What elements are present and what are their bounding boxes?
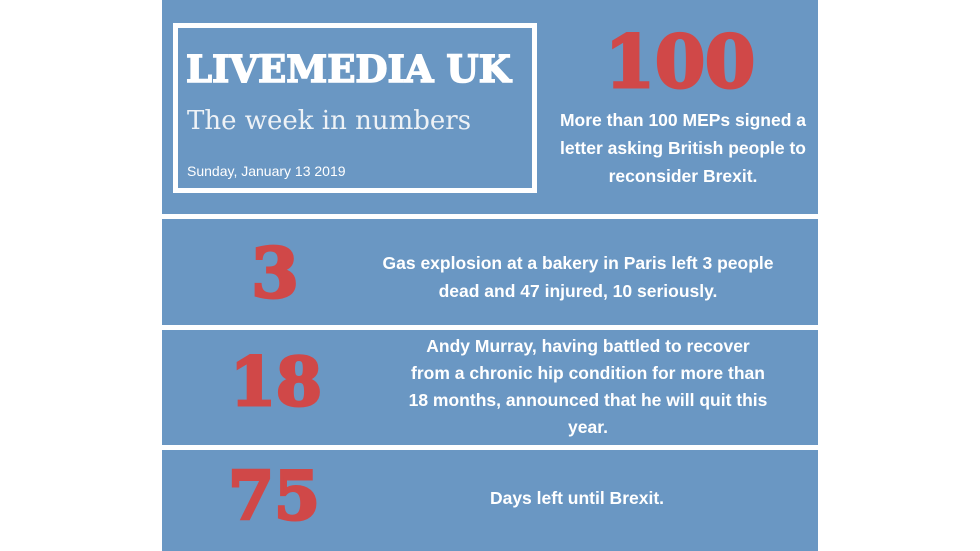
panel: row 3 [162, 219, 818, 325]
text: MEPs letter: letter asking British people to [560, 138, 806, 158]
panel: row 75 [162, 450, 818, 551]
title: LIVEMEDIA UK [186, 47, 511, 91]
text: brexit days: Days left until Brexit. [490, 488, 664, 508]
stat: 75: 75 [228, 457, 320, 535]
stat: 100: 100 [605, 19, 755, 104]
text: Andy Murray: 18 months, announced that he will quit this [409, 390, 767, 410]
stat: 18: 18 [230, 343, 322, 421]
text: Andy Murray: year. [568, 417, 608, 437]
text: gas explosion: Gas explosion at a bakery in Paris left 3 people [382, 253, 773, 273]
text: Andy Murray [409, 336, 767, 437]
subtitle: The week in numbers [187, 106, 471, 136]
text: MEPs letter: reconsider Brexit. [609, 166, 757, 186]
text: MEPs letter: More than 100 MEPs signed a [560, 110, 806, 130]
title box [173, 23, 537, 193]
date: Sunday, January 13 2019 [187, 163, 346, 179]
text: Andy Murray: from a chronic hip condition for more than [411, 363, 765, 383]
stat: 3: 3 [251, 234, 299, 314]
text: Andy Murray: Andy Murray, having battled to recover [426, 336, 750, 356]
text: gas explosion: dead and 47 injured, 10 seriously. [439, 281, 717, 301]
panel: header row [162, 0, 818, 214]
text: MEPs letter [560, 110, 806, 186]
text: gas explosion [382, 253, 773, 301]
panel: row 18 [162, 330, 818, 445]
